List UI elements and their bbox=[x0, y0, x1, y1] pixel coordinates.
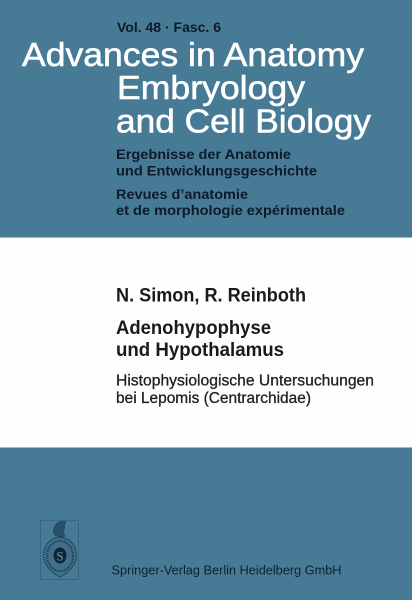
book subtitle bbox=[116, 372, 374, 407]
series title: and Cell Biology bbox=[116, 104, 371, 140]
German series subtitle: Ergebnisse der Anatomie bbox=[116, 147, 291, 162]
book title: und Hypothalamus bbox=[116, 340, 284, 361]
book subtitle: Histophysiologische Untersuchungen bbox=[116, 372, 374, 390]
series title bbox=[22, 37, 371, 140]
French series subtitle bbox=[116, 187, 345, 218]
authors: N. Simon, R. Reinboth bbox=[116, 286, 306, 306]
series title: Advances in Anatomy bbox=[22, 37, 364, 74]
French series subtitle: et de morphologie expérimentale bbox=[116, 203, 345, 218]
German series subtitle: und Entwicklungsgeschichte bbox=[116, 164, 317, 178]
French series subtitle: Revues d’anatomie bbox=[116, 187, 248, 202]
volume and fascicle line: Vol. 48 · Fasc. 6 bbox=[117, 20, 222, 35]
icon: Springer horse-head emblem: S bbox=[56, 548, 64, 564]
icon: Springer horse-head emblem bbox=[40, 520, 78, 580]
book title: Adenohypophyse bbox=[116, 318, 271, 339]
German series subtitle bbox=[116, 147, 317, 178]
series title: Embryology bbox=[117, 70, 305, 107]
book subtitle: bei Lepomis (Centrarchidae) bbox=[116, 390, 311, 407]
book title bbox=[116, 318, 284, 361]
panel: white title band bbox=[0, 238, 412, 448]
publisher imprint: Springer-Verlag Berlin Heidelberg GmbH bbox=[112, 564, 342, 578]
